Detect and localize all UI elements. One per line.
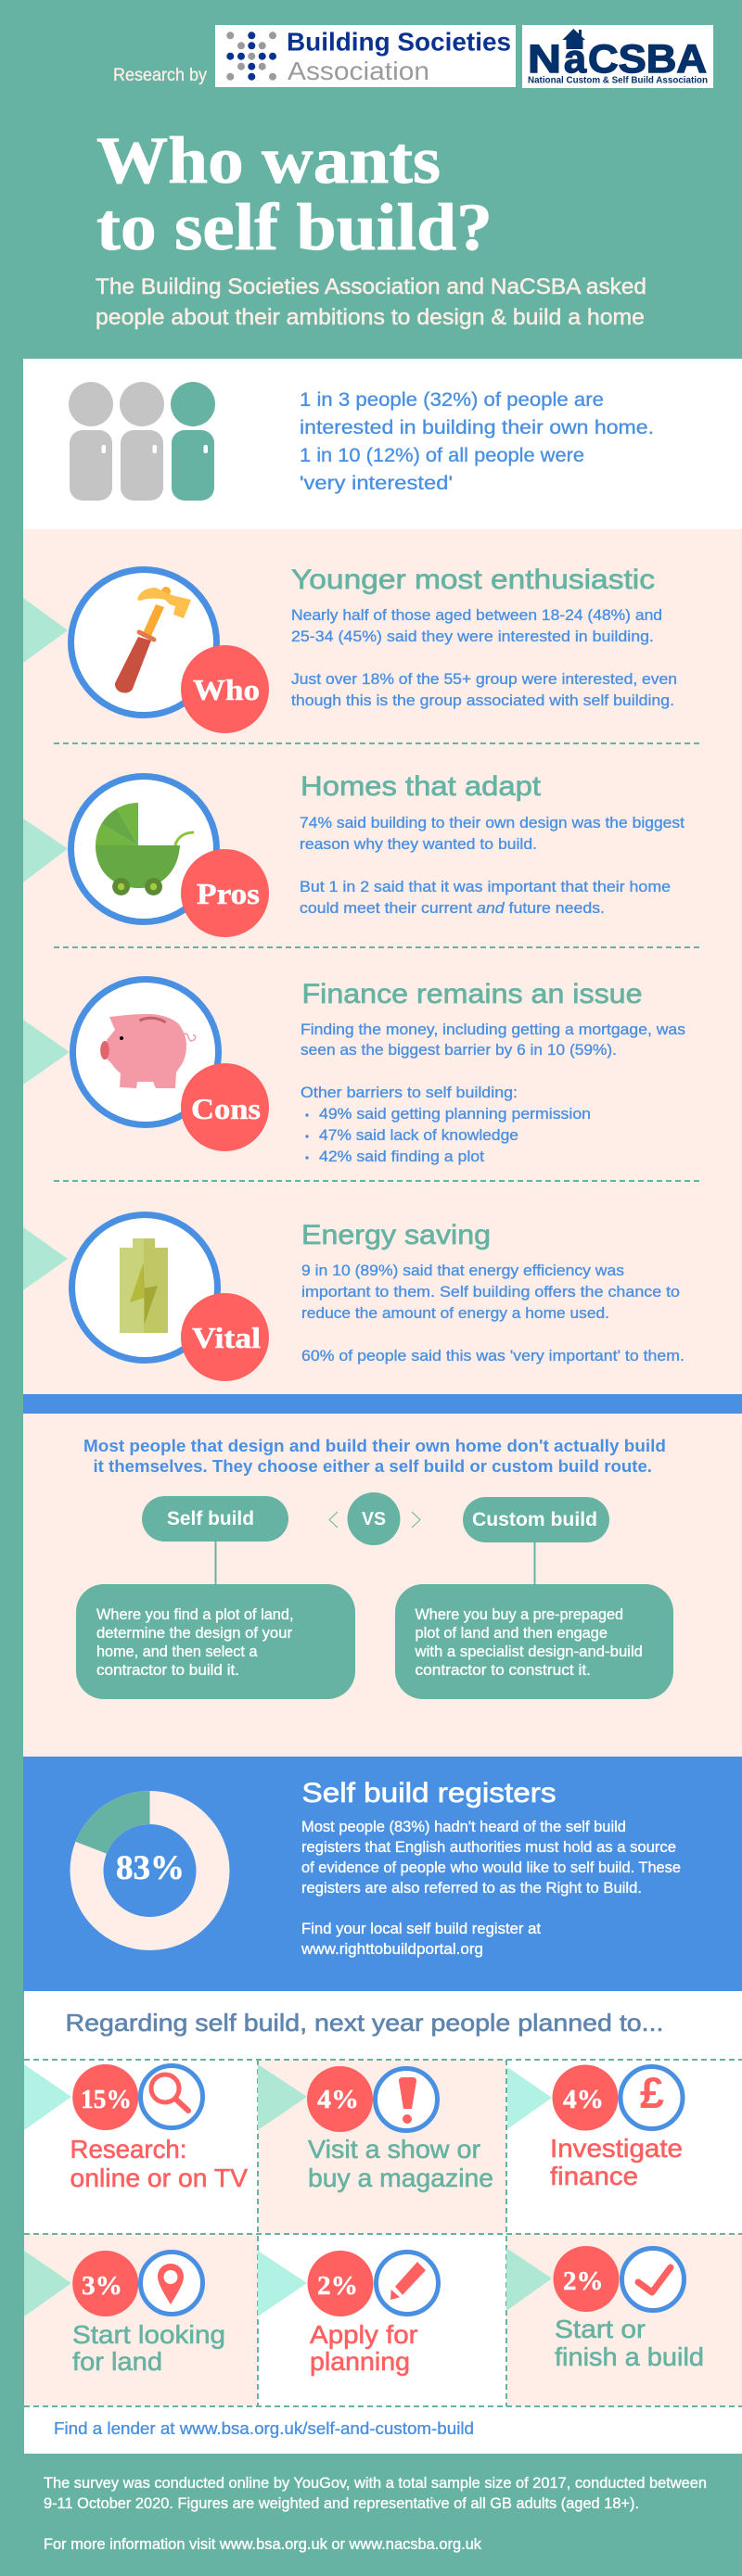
text block: But 1 in 2 said that it was important that their home xyxy=(300,878,671,895)
icon: hammer xyxy=(70,569,217,716)
icon: check mark xyxy=(638,2267,671,2292)
list: other barriers: 49% said getting planning permission xyxy=(319,1105,591,1123)
list: other barriers: 47% said lack of knowledge xyxy=(319,1126,518,1144)
badge: cons xyxy=(181,1063,269,1151)
text block xyxy=(301,1021,685,1101)
text block: Finding the money, including getting a mortgage, was xyxy=(301,1021,685,1038)
badge: vital: Vital xyxy=(192,1321,261,1354)
box: self build definition: Where you find a plot of land, xyxy=(96,1605,293,1623)
item: investigate finance: finance xyxy=(550,2162,638,2190)
logo: Building Societies Association xyxy=(215,25,516,87)
badge: pros xyxy=(181,849,269,937)
icon: map pin xyxy=(158,2264,184,2304)
box: custom build definition: with a specialist design-and-build xyxy=(415,1643,643,1660)
icon: magnifier xyxy=(151,2075,188,2111)
footer: survey notes: The survey was conducted online by YouGov, with a total sample size of 2017, conducted between xyxy=(44,2475,707,2492)
footer: survey notes xyxy=(44,2475,707,2553)
text block xyxy=(301,1818,681,1958)
badge: pros: Pros xyxy=(197,877,260,910)
section: cons xyxy=(23,979,685,1165)
intro text xyxy=(83,1437,666,1476)
subtitle: The Building Societies Association and NaCSBA asked xyxy=(96,274,646,299)
panel: next year plans xyxy=(24,1991,742,2454)
text: interest statistics: 'very interested' xyxy=(300,473,453,494)
item: look for land xyxy=(24,2251,225,2376)
text block: could meet their current and future needs. xyxy=(300,899,605,917)
heading: Finance remains an issue xyxy=(302,979,642,1009)
text block: seen as the biggest barrier by 6 in 10 (59%). xyxy=(301,1041,617,1059)
box: self build definition: contractor to build it. xyxy=(96,1661,239,1679)
box: custom build definition: plot of land and then engage xyxy=(416,1624,608,1642)
intro text: it themselves. They choose either a self build or custom build route. xyxy=(93,1457,652,1476)
subtitle xyxy=(96,274,646,330)
item: research xyxy=(24,2064,248,2192)
item: start or finish a build: finish a build xyxy=(555,2342,704,2371)
heading: Regarding self build, next year people planned to... xyxy=(65,2009,664,2037)
section: vital xyxy=(23,1214,684,1381)
text block: important to them. Self building offers the chance to xyxy=(301,1283,680,1301)
logo: NaCSBA: N xyxy=(528,37,561,82)
text: interest statistics: 1 in 10 (12%) of all people were xyxy=(300,445,584,466)
arrow xyxy=(23,1020,70,1085)
text block: www.righttobuildportal.org xyxy=(301,1940,483,1958)
item: apply for planning xyxy=(258,2251,438,2376)
heading: Younger most enthusiastic xyxy=(291,565,655,595)
text: interest statistics xyxy=(300,389,654,494)
text block: Just over 18% of the 55+ group were interested, even xyxy=(291,670,677,688)
panel: self build vs custom build xyxy=(23,1414,742,1757)
badge: versus xyxy=(329,1492,420,1545)
panel: peach findings background xyxy=(23,529,742,1394)
text block xyxy=(300,814,684,917)
badge: vital xyxy=(181,1293,269,1381)
item: visit a show: buy a magazine xyxy=(308,2164,493,2192)
logo: NaCSBA xyxy=(522,25,713,88)
text block xyxy=(301,1262,684,1364)
item: look for land: 3% xyxy=(82,2272,122,2301)
text block: though this is the group associated with self building. xyxy=(291,692,674,709)
arrow xyxy=(23,818,68,882)
item: visit a show: 4% xyxy=(317,2086,359,2114)
intro text: Most people that design and build their own home don't actually build xyxy=(83,1437,666,1455)
title: to self build? xyxy=(96,190,493,264)
text block: registers that English authorities must hold as a source xyxy=(301,1838,676,1856)
text block: Other barriers to self building: xyxy=(301,1084,518,1101)
arrow xyxy=(23,598,68,663)
item: visit a show xyxy=(258,2064,493,2192)
item: start or finish a build xyxy=(506,2246,704,2371)
text block: 60% of people said this was 'very important' to them. xyxy=(301,1347,684,1364)
text block: reduce the amount of energy a home used. xyxy=(301,1304,609,1322)
logo: NaCSBA: National Custom & Self Build Association xyxy=(528,74,708,85)
text: interest statistics: interested in building their own home. xyxy=(300,417,654,438)
title: Who wants xyxy=(96,123,441,197)
item: investigate finance: 4% xyxy=(563,2086,604,2114)
logo: NaCSBA: a xyxy=(564,37,587,82)
logo: NaCSBA: CSBA xyxy=(588,37,707,82)
logo: Building Societies Association: Association xyxy=(288,57,429,85)
item: look for land: Start looking xyxy=(72,2320,225,2349)
icon: pound sign: £ xyxy=(640,2068,664,2117)
subtitle: people about their ambitions to design & build a home xyxy=(96,305,645,330)
chart: donut 83%: 83% xyxy=(116,1849,185,1887)
arrow xyxy=(23,1227,68,1290)
pill: self build: Self build xyxy=(167,1508,254,1529)
box: custom build definition: Where you buy a pre-prepaged xyxy=(416,1605,623,1623)
text block: reason why they wanted to build. xyxy=(300,835,537,853)
section: pros xyxy=(23,771,684,937)
text block: registers are also referred to as the Right to Build. xyxy=(301,1879,642,1897)
item: start or finish a build: Start or xyxy=(555,2315,646,2343)
text block: 25-34 (45%) said they were interested in building. xyxy=(291,628,654,645)
icon: pencil xyxy=(390,2262,426,2300)
badge: versus: VS xyxy=(362,1509,386,1529)
item: research: online or on TV xyxy=(70,2164,248,2192)
heading: Homes that adapt xyxy=(301,771,542,802)
icon: battery xyxy=(72,1214,217,1361)
text block xyxy=(291,606,677,709)
icon: exclamation xyxy=(399,2077,416,2124)
text block: Most people (83%) hadn't heard of the self build xyxy=(301,1818,626,1835)
badge: cons: Cons xyxy=(191,1092,261,1125)
box: custom build definition: contractor to construct it. xyxy=(416,1661,591,1679)
box: self build definition: determine the design of your xyxy=(96,1624,292,1642)
item: investigate finance xyxy=(507,2065,683,2190)
list: other barriers: 42% said finding a plot xyxy=(319,1148,484,1165)
heading: Self build registers xyxy=(302,1778,556,1808)
text block: of evidence of people who would like to self build. These xyxy=(301,1859,681,1876)
text: interest statistics: 1 in 3 people (32%) of people are xyxy=(300,389,604,411)
heading: Energy saving xyxy=(301,1220,491,1250)
item: apply for planning: Apply for xyxy=(310,2320,417,2349)
text block: Find your local self build register at xyxy=(301,1920,541,1937)
box: custom build definition xyxy=(395,1584,673,1699)
box: self build definition xyxy=(76,1584,355,1699)
item: start or finish a build: 2% xyxy=(563,2267,603,2296)
badge: who: Who xyxy=(193,673,260,706)
item: visit a show: Visit a show or xyxy=(308,2135,480,2164)
logo: Building Societies Association: Building Societies xyxy=(287,28,511,56)
item: research: 15% xyxy=(81,2086,132,2114)
pill: custom build xyxy=(463,1497,609,1542)
chart: donut 83% xyxy=(75,1791,213,1934)
text block: 74% said building to their own design was the biggest xyxy=(300,814,684,831)
item: apply for planning: 2% xyxy=(317,2272,358,2301)
pill: custom build: Custom build xyxy=(472,1509,597,1530)
icon: pram xyxy=(70,777,217,921)
title xyxy=(96,123,493,264)
header: research by logos xyxy=(113,25,713,88)
pill: self build xyxy=(142,1496,288,1542)
icon: three people xyxy=(69,382,215,501)
item: investigate finance: Investigate xyxy=(550,2134,683,2163)
item: apply for planning: planning xyxy=(310,2347,410,2376)
item: research: Research: xyxy=(70,2135,187,2164)
link: find a lender: Find a lender at www.bsa.org.uk/self-and-custom-build xyxy=(54,2419,474,2438)
panel: 1 in 3 people xyxy=(23,359,742,529)
section: who xyxy=(23,565,677,733)
item: look for land: for land xyxy=(72,2347,162,2376)
badge: who xyxy=(181,645,269,733)
panel: self build registers xyxy=(23,1757,742,1991)
footer: survey notes: For more information visit www.bsa.org.uk or www.nacsba.org.uk xyxy=(44,2536,482,2553)
box: self build definition: home, and then select a xyxy=(96,1643,258,1660)
text block: Nearly half of those aged between 18-24 (48%) and xyxy=(291,606,662,624)
label: research by: Research by xyxy=(113,66,207,85)
list: other barriers xyxy=(305,1105,591,1165)
icon: piggy bank xyxy=(72,979,219,1125)
text block: 9 in 10 (89%) said that energy efficiency was xyxy=(301,1262,624,1279)
footer: survey notes: 9-11 October 2020. Figures are weighted and representative of all GB adults (aged 18+). xyxy=(44,2495,639,2512)
